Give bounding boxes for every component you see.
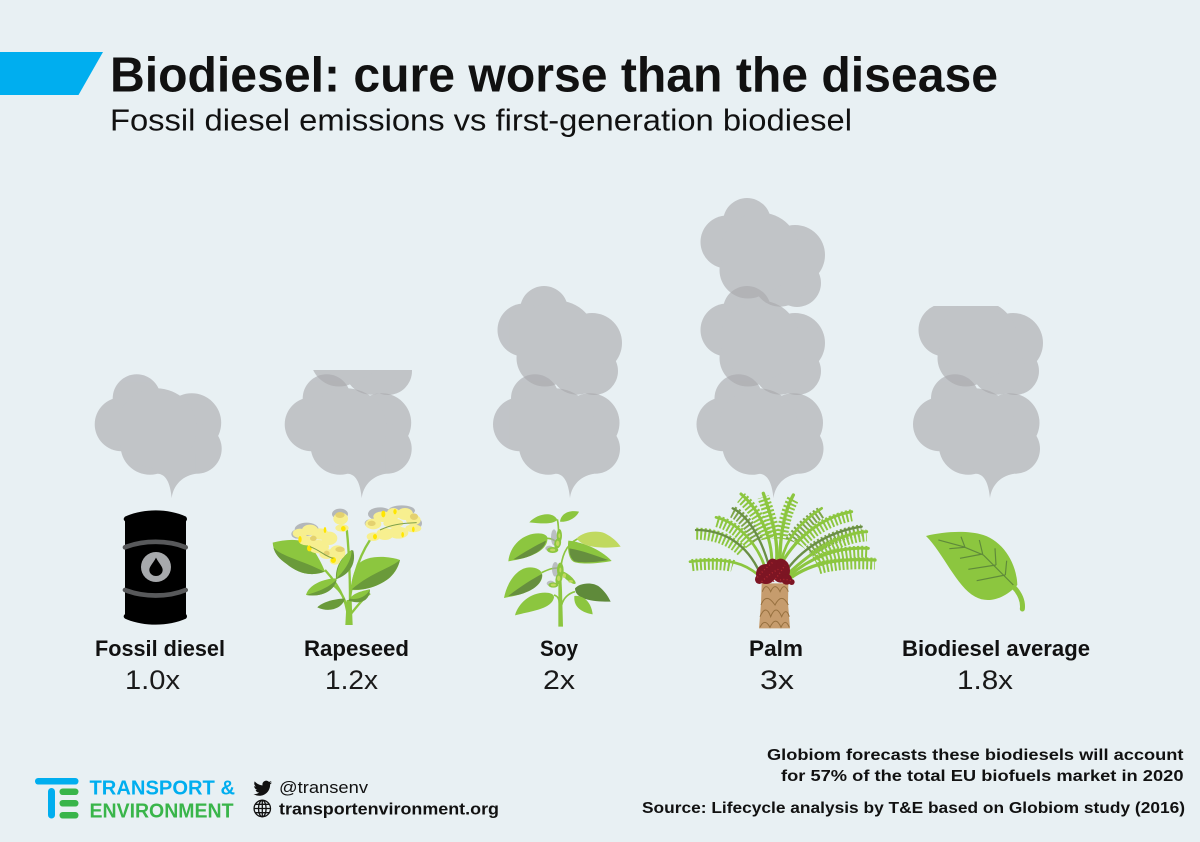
- cloud: palm top: [700, 198, 825, 307]
- value: 1.0x: 1.0x: [125, 665, 181, 695]
- logo wordmark top: TRANSPORT &: [90, 776, 235, 800]
- note line 1: Globiom forecasts these biodiesels will account: [767, 747, 1184, 764]
- value: 1.2x: 1.2x: [325, 665, 379, 695]
- icon: oil palm: [690, 493, 875, 628]
- value: 1.8x: 1.8x: [957, 665, 1014, 695]
- logo: Transport and Environment: [35, 776, 235, 822]
- cloud: soy lower: [493, 374, 620, 498]
- panel: palm: [690, 198, 875, 695]
- label: palm: Palm: [749, 636, 803, 661]
- cloud: fossil diesel: [95, 374, 222, 498]
- icon: green leaf: [926, 532, 1023, 609]
- source: Source: Lifecycle analysis by T&E based on Globiom study (2016): [642, 800, 1185, 817]
- header tag: [0, 52, 103, 95]
- icon: globe: [254, 800, 270, 817]
- panel: fossil diesel: [95, 374, 225, 695]
- panel: rapeseed: [272, 370, 422, 689]
- cloud: soy upper: [498, 286, 622, 395]
- cloud: rapeseed lower: [285, 374, 412, 498]
- icon: soy plant: [504, 511, 621, 627]
- note line 2: for 57% of the total EU biofuels market in 2020: [781, 768, 1184, 785]
- icon: rapeseed plant: [273, 505, 422, 625]
- note: Globiom forecast: [767, 747, 1184, 785]
- label: rapeseed: Rapeseed: [304, 636, 409, 661]
- cloud: palm middle: [700, 286, 825, 395]
- label: soy: Soy: [540, 636, 579, 661]
- title: Biodiesel: cure worse than the disease: [110, 48, 998, 102]
- value: 3x: 3x: [760, 665, 795, 695]
- icon: twitter: [254, 781, 272, 796]
- website: transportenvironment.org: [279, 800, 499, 818]
- cloud: palm lower: [696, 374, 824, 498]
- cloud: average lower: [913, 374, 1040, 498]
- panel: soy: [493, 286, 622, 695]
- cloud: rapeseed upper: [313, 370, 412, 395]
- value: 2x: 2x: [543, 665, 576, 695]
- twitter handle: @transenv: [279, 779, 369, 797]
- icon: oil barrel: [124, 510, 187, 625]
- cloud: average upper: [918, 306, 1043, 395]
- label: fossil diesel: Fossil diesel: [95, 636, 225, 661]
- subtitle: Fossil diesel emissions vs first-generation biodiesel: [110, 102, 852, 138]
- label: biodiesel average: Biodiesel average: [902, 636, 1090, 661]
- logo mark: [35, 778, 78, 818]
- logo wordmark bottom: ENVIRONMENT: [90, 800, 234, 822]
- panel: biodiesel average: [902, 286, 1090, 695]
